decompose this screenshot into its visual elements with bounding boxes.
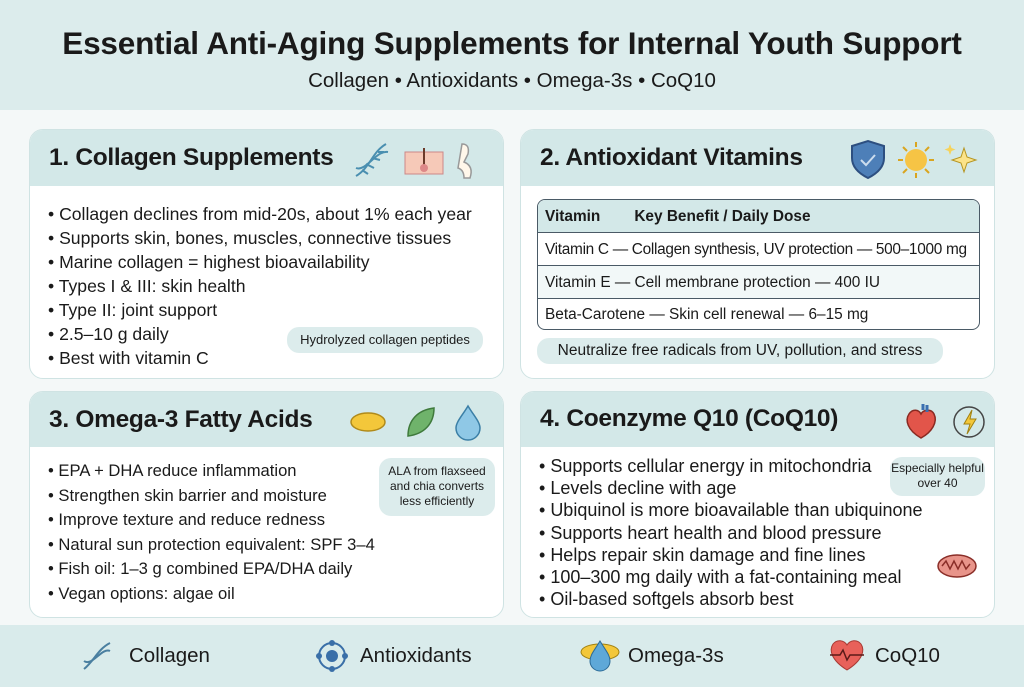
footer: antioxidants: Antioxidants xyxy=(360,644,472,667)
bullet list: 100–300 mg daily with a fat-containing meal xyxy=(550,567,902,587)
heading xyxy=(521,130,994,186)
footer band xyxy=(0,625,1024,687)
bullet list: Supports skin, bones, muscles, connective tissues xyxy=(59,228,451,248)
table: Vitamin Key Benefit / Daily Dose xyxy=(545,208,811,225)
bullet list xyxy=(48,204,472,368)
bullet list: Types I & III: skin health xyxy=(59,276,246,296)
header band xyxy=(0,0,1024,110)
bullet list: EPA + DHA reduce inflammation xyxy=(58,461,297,480)
heading xyxy=(521,392,994,447)
table: Vitamin C — Collagen synthesis, UV protection — 500–1000 mg xyxy=(545,241,967,258)
heading xyxy=(30,130,503,186)
icons: capsule leaf drop xyxy=(350,404,481,441)
bullet list: Supports heart health and blood pressure xyxy=(550,523,882,543)
callout xyxy=(379,458,495,516)
footer: antioxidants xyxy=(316,640,472,672)
callout: Hydrolyzed collagen peptides xyxy=(300,332,470,347)
bullet list: Marine collagen = highest bioavailability xyxy=(59,252,370,272)
bullet list: 2.5–10 g daily xyxy=(59,324,169,344)
bullet list: Collagen declines from mid-20s, about 1% each year xyxy=(59,204,472,224)
bullet list: Best with vitamin C xyxy=(59,348,209,368)
icons: heart energy xyxy=(906,404,985,439)
panel: omega-3 xyxy=(29,391,504,618)
heading xyxy=(30,392,503,447)
panel: collagen xyxy=(29,129,504,379)
bullet list: Natural sun protection equivalent: SPF 3–4 xyxy=(58,535,375,554)
heading: 4. Coenzyme Q10 (CoQ10) xyxy=(540,405,838,432)
bullet list xyxy=(540,456,923,609)
table xyxy=(537,199,980,330)
panel: antioxidants xyxy=(520,129,995,379)
bullet list: Fish oil: 1–3 g combined EPA/DHA daily xyxy=(58,559,352,578)
footer: collagen: Collagen xyxy=(129,644,210,667)
footer: coq10 xyxy=(830,640,940,670)
callout xyxy=(287,327,483,353)
title: Essential Anti-Aging Supplements for Internal Youth Support xyxy=(62,25,962,61)
heading: 2. Antioxidant Vitamins xyxy=(540,144,803,171)
table: Beta-Carotene — Skin cell renewal — 6–15 mg xyxy=(545,306,868,323)
callout xyxy=(537,338,943,364)
bullet list: Strengthen skin barrier and moisture xyxy=(58,486,327,505)
bullet list: Levels decline with age xyxy=(550,478,736,498)
bullet list: Helps repair skin damage and fine lines xyxy=(550,545,866,565)
heading: 3. Omega-3 Fatty Acids xyxy=(49,406,312,433)
bullet list: Oil-based softgels absorb best xyxy=(550,589,793,609)
icons: dna skin joint xyxy=(356,143,472,179)
icon: mitochondria xyxy=(937,554,977,578)
bullet list: Vegan options: algae oil xyxy=(58,584,235,603)
bullet list: Type II: joint support xyxy=(59,300,217,320)
callout: Especially helpful over 40 xyxy=(891,461,984,490)
bullet list: Supports cellular energy in mitochondria xyxy=(550,456,871,476)
footer: omega-3s: Omega-3s xyxy=(628,644,724,667)
subtitle: Collagen • Antioxidants • Omega-3s • CoQ10 xyxy=(308,69,716,92)
bullet list xyxy=(48,461,375,603)
panel: coq10 xyxy=(520,391,995,618)
bullet list: Improve texture and reduce redness xyxy=(58,510,325,529)
bullet list: Ubiquinol is more bioavailable than ubiquinone xyxy=(550,500,923,520)
table: Vitamin E — Cell membrane protection — 400 IU xyxy=(545,274,880,291)
heading: 1. Collagen Supplements xyxy=(49,144,333,171)
footer: collagen xyxy=(83,642,210,670)
icons: shield sun sparkle xyxy=(851,140,978,180)
footer: coq10: CoQ10 xyxy=(875,644,940,667)
footer: omega-3s xyxy=(580,640,724,672)
callout: ALA from flaxseed and chia converts less efficiently xyxy=(388,464,486,508)
callout: Neutralize free radicals from UV, pollution, and stress xyxy=(558,342,922,359)
